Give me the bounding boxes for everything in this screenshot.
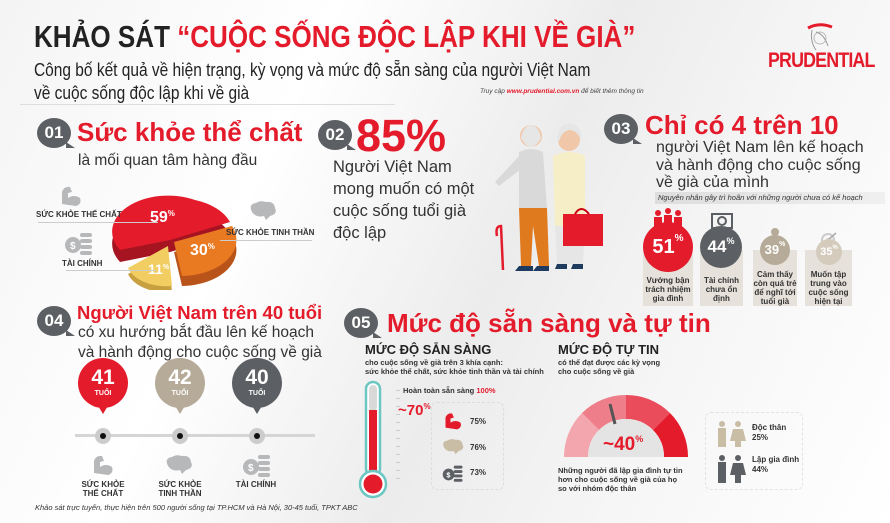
panel: 04 over 40 (37, 302, 322, 498)
box 3 aspects (431, 402, 504, 490)
panel: 01 health (36, 117, 314, 290)
strip note: Nguyên nhân gây trì hoãn với những người chưa có kế hoạch (658, 193, 863, 202)
box singles vs married: 25% (752, 433, 768, 442)
text 02: Người Việt Nam (333, 158, 452, 176)
stat 39%: 39% (765, 241, 785, 257)
stat 51%: Vướng bận trách nhiệm gia đình (645, 276, 691, 303)
icon: coins: $ (70, 241, 76, 252)
sub 01: là mối quan tâm hàng đầu (78, 152, 257, 169)
heading 01: Sức khỏe thể chất (77, 117, 302, 147)
stat 35%: Muốn tập trung vào cuộc sống hiện tại (808, 270, 848, 306)
box singles vs married: 44% (752, 465, 768, 474)
badge 04: 04 (45, 311, 63, 330)
panel: 03 4 out of 10 (604, 110, 885, 306)
badge 02 (318, 120, 352, 150)
sub 03: về già của mình (656, 174, 769, 191)
badge 02: 02 (326, 125, 344, 144)
sub 03: người Việt Nam lên kế hoạch (656, 139, 864, 156)
sub 03: và hành động cho cuộc sống (656, 156, 861, 174)
panel: 04 over 40: SỨC KHỎE TINH THẦN (158, 480, 202, 498)
source link: Truy cập www.prudential.com.vn để biết thêm thông tin (480, 88, 644, 95)
gauge (564, 395, 688, 457)
logo: prudential: PRUDENTIAL (768, 49, 875, 72)
badge 05: 05 (352, 313, 370, 332)
text 02: cuộc sống tuổi già (333, 202, 466, 220)
pin 40: 40 (245, 366, 269, 389)
stat 35%: 35% (820, 245, 838, 258)
box 3 aspects: 76% (470, 443, 486, 452)
pin 41: 41 (91, 366, 115, 389)
badge 03: 03 (612, 119, 630, 138)
stat 44% (700, 213, 742, 303)
pin 40 (232, 358, 282, 444)
gauge: % (635, 434, 643, 444)
stat 39% (753, 228, 797, 306)
subtitle: về cuộc sống độc lập khi về già (34, 83, 249, 103)
pie chart: 11 (148, 261, 163, 277)
stat 44%: Tài chính chưa ổn định (704, 276, 739, 303)
stats row (643, 208, 852, 306)
pin 41: TUỔI (95, 390, 111, 397)
title: KHẢO SÁT “CUỘC SỐNG ĐỘC LẬP KHI VỀ GIÀ” (34, 19, 635, 54)
strip note (655, 192, 885, 204)
confidence block: hơn cho cuộc sống về già của họ (558, 475, 677, 484)
panel: 01 health: SỨC KHỎE TINH THẦN (226, 228, 314, 237)
panel: 04 over 40: SỨC KHỎE THỂ CHẤT (81, 480, 125, 498)
confidence block: cho cuộc sống về già (558, 367, 634, 376)
text 02: độc lập (333, 224, 386, 242)
gauge: ~40 (603, 434, 635, 455)
thermometer (358, 380, 388, 498)
badge 04 (37, 306, 71, 336)
pie chart: % (163, 264, 170, 271)
panel: 01 health: SỨC KHỎE THỂ CHẤT (36, 210, 122, 219)
confidence block: MỨC ĐỘ TỰ TIN (558, 342, 659, 357)
heading 03: Chỉ có 4 trên 10 (645, 110, 839, 140)
confidence block: so với nhóm độc thân (558, 484, 636, 493)
readiness block (358, 342, 544, 498)
pie chart (112, 196, 236, 290)
icon: coins 04: $ (248, 463, 254, 474)
subtitle: Công bố kết quả về hiện trạng, kỳ vọng và mức độ sẵn sàng của người Việt Nam (34, 60, 590, 80)
heading 04: Người Việt Nam trên 40 tuổi (77, 302, 322, 323)
stat 39%: Cảm thấy còn quá trẻ để nghĩ tới tuổi già (753, 270, 797, 306)
box singles vs married: Lập gia đình (752, 455, 799, 464)
box 3 aspects: $ (446, 470, 450, 479)
confidence block (558, 342, 803, 493)
panel: 05 readiness & confidence (344, 308, 803, 498)
icon: brain 04 (166, 455, 192, 474)
badge 03 (604, 114, 638, 144)
sub 03 (656, 139, 864, 191)
box 3 aspects: 73% (470, 468, 486, 477)
logo: prudential (768, 23, 875, 72)
text 02: mong muốn có một (333, 180, 474, 198)
readiness block: sức khỏe thể chất, sức khỏe tinh thần và tài chính (365, 367, 544, 376)
stat 51% (643, 208, 693, 303)
confidence block: có thể đạt được các kỳ vọng (558, 358, 660, 367)
pin 40: TUỔI (249, 390, 265, 397)
stat 51%: 51% (652, 233, 684, 258)
illustration: elderly couple (495, 125, 603, 271)
pin 41 (78, 358, 128, 444)
readiness block: MỨC ĐỘ SẴN SÀNG (365, 342, 491, 357)
pie chart: % (168, 209, 175, 218)
box singles vs married: Độc thân (752, 423, 786, 432)
box 3 aspects: 75% (470, 417, 486, 426)
panel: 01 health: TÀI CHÍNH (62, 259, 102, 268)
icon: coins (65, 233, 92, 255)
subtitle (34, 60, 590, 103)
box singles vs married (705, 412, 803, 490)
badge 01: 01 (45, 123, 63, 142)
icon: arm 04 (94, 456, 112, 475)
panel: 04 over 40: TÀI CHÍNH (236, 480, 276, 489)
stat 44%: 44% (708, 236, 734, 256)
pie chart: % (208, 242, 215, 251)
panel: 02 85% (318, 110, 603, 271)
confidence block: Những người đã lập gia đình tự tin (558, 466, 683, 475)
sub 04 (78, 323, 322, 361)
pie chart: 59 (150, 209, 168, 226)
big stat 85%: 85% (356, 110, 446, 161)
pin 42: 42 (168, 366, 192, 389)
heading 05: Mức độ sẵn sàng và tự tin (387, 308, 711, 338)
badge 05 (344, 308, 378, 338)
text 02 (333, 158, 474, 242)
readiness block: cho cuộc sống về già trên 3 khía cạnh: (365, 358, 503, 367)
sub 04: có xu hướng bắt đầu lên kế hoạch (78, 324, 314, 341)
icon: arm (62, 186, 80, 206)
pin 42 (155, 358, 205, 444)
icon: coins 04 (243, 455, 270, 477)
sub 04: và hành động cho cuộc sống về già (78, 344, 322, 361)
pin 42: TUỔI (172, 390, 188, 397)
readiness block: ~70% (398, 402, 431, 419)
icon: brain (250, 201, 276, 220)
footnote: Khảo sát trực tuyến, thực hiện trên 500 người sống tại TP.HCM và Hà Nội, 30-45 tuổi, TPKT ABC (35, 503, 358, 512)
readiness block: Hoàn toàn sẵn sàng 100% (403, 386, 496, 395)
badge 01 (37, 118, 71, 148)
pie chart: 30 (190, 242, 208, 259)
stat 35% (808, 232, 848, 306)
